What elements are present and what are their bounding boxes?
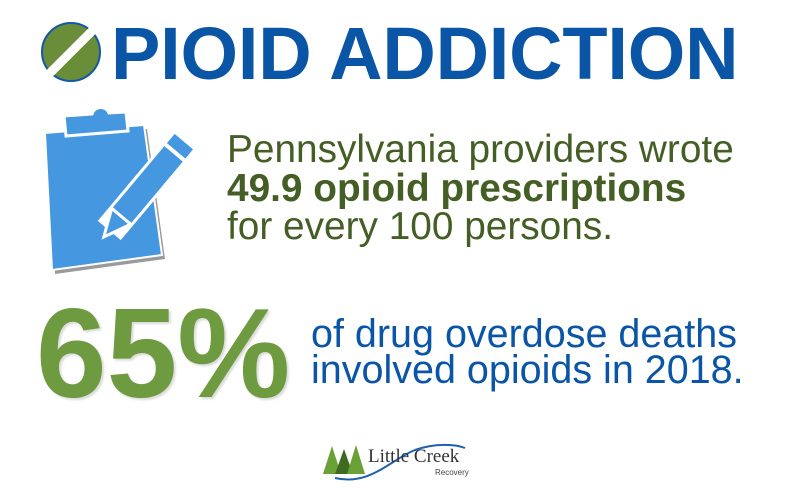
big number 65%: 65% xyxy=(36,282,290,424)
text block: prescriptions stat xyxy=(227,128,734,248)
title text: PIOID ADDICTION xyxy=(111,12,738,95)
text block: overdose stat xyxy=(311,312,744,392)
text block: prescriptions stat: for every 100 persons. xyxy=(227,205,613,248)
icon: pill circle O xyxy=(41,22,101,82)
text block: overdose stat: of drug overdose deaths xyxy=(311,312,737,356)
icon: clipboard and pencil xyxy=(46,109,193,274)
logo: Little Creek Recovery xyxy=(323,444,469,480)
text block: prescriptions stat: Pennsylvania providers wrote xyxy=(227,128,734,171)
logo: Little Creek Recovery: Little Creek xyxy=(368,446,459,467)
title xyxy=(41,12,738,95)
text block: overdose stat: involved opioids in 2018. xyxy=(311,348,744,392)
logo: Little Creek Recovery: Recovery xyxy=(435,468,469,477)
text block: prescriptions stat: 49.9 opioid prescriptions xyxy=(227,166,686,210)
